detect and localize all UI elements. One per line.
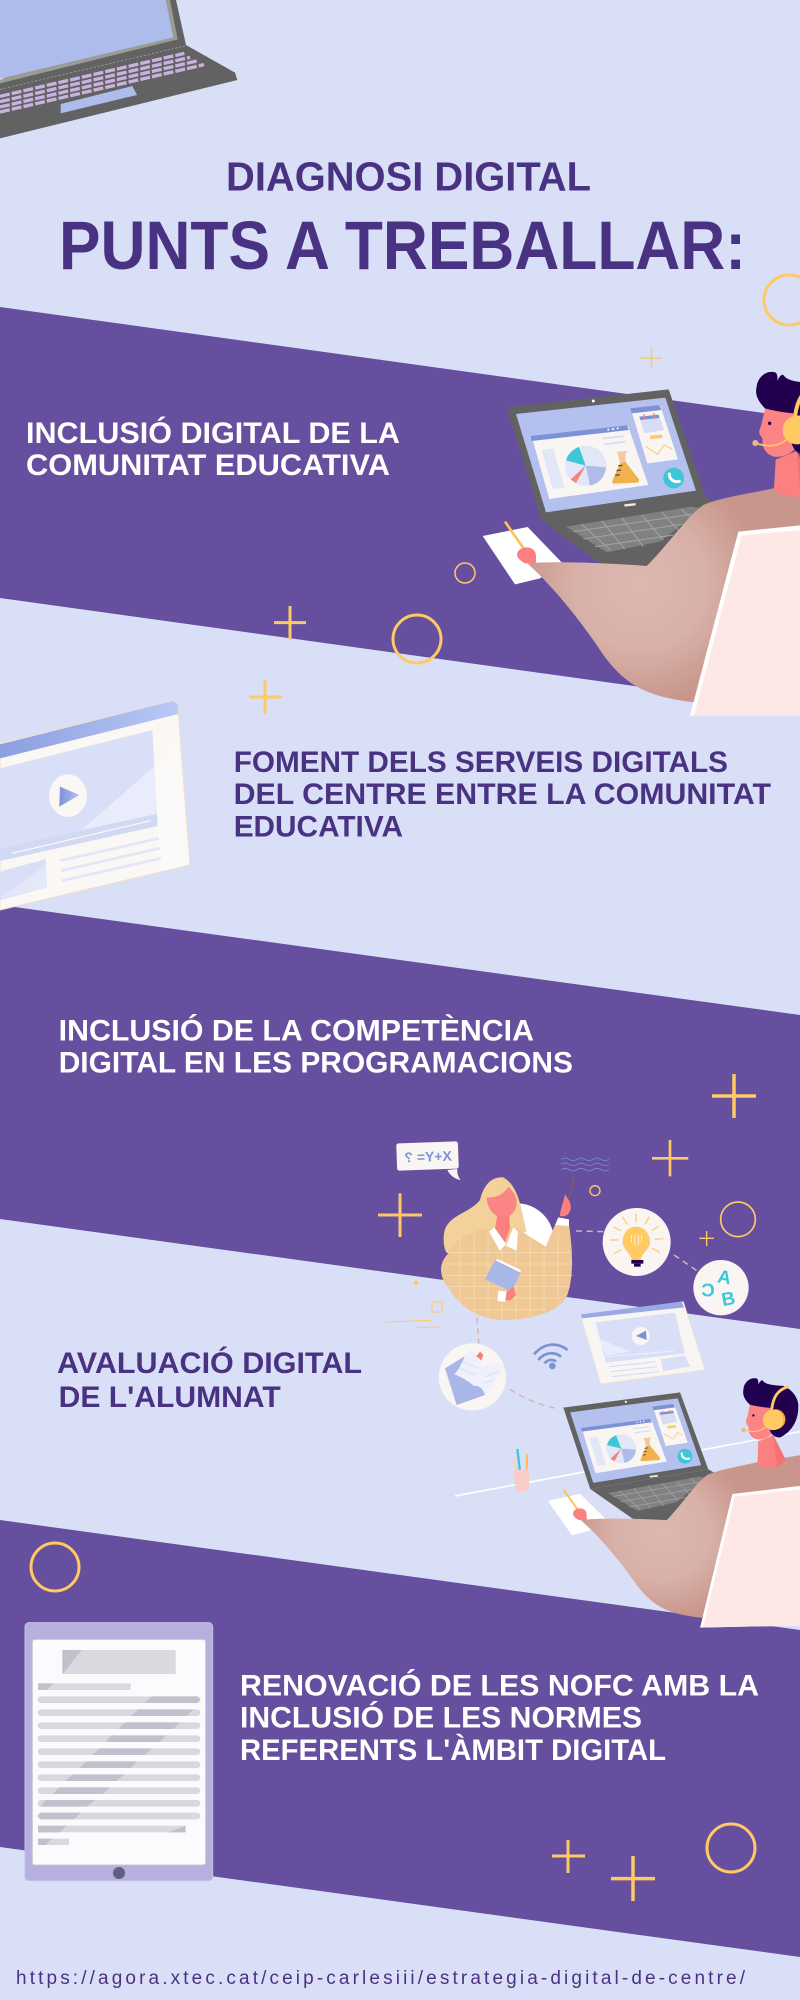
speech bubble: X+Y= ? — [404, 1148, 452, 1165]
title: punts a treballar: PUNTS A TREBALLAR: — [59, 207, 746, 284]
illustration: worker with laptop, second — [545, 1377, 800, 1631]
arm — [527, 478, 800, 702]
teacher — [441, 1177, 574, 1320]
deco: band 1 accents — [249, 275, 800, 714]
text block: competència: DIGITAL EN LES PROGRAMACIONS — [59, 1047, 573, 1080]
text block: avaluació — [57, 1346, 362, 1414]
illustration: video screen — [0, 701, 190, 910]
speech bubble — [396, 1141, 461, 1180]
abc circle: C — [701, 1280, 715, 1301]
small video window — [581, 1302, 705, 1384]
illustration: tablet document — [25, 1623, 213, 1881]
book circle — [439, 1343, 506, 1411]
accents — [378, 1140, 755, 1328]
text block: avaluació: AVALUACIÓ DIGITAL — [57, 1346, 362, 1380]
band 2 — [0, 905, 800, 1329]
deco: band 3 accents — [31, 1543, 755, 1901]
text block: inclusió digital: COMUNITAT EDUCATIVA — [26, 449, 390, 482]
dashed connectors — [477, 1231, 698, 1408]
band 3 — [0, 1520, 800, 1957]
source url: https://agora.xtec.cat/ceip-carlesiii/estrategia-digital-de-centre/ — [16, 1968, 746, 1989]
paper and pen — [483, 522, 562, 584]
text block: renovació: REFERENTS L'ÀMBIT DIGITAL — [240, 1733, 666, 1767]
person — [752, 372, 800, 497]
text block: renovació — [240, 1668, 759, 1767]
text block: inclusió digital: INCLUSIÓ DIGITAL DE LA — [26, 416, 400, 450]
illustration: worker with laptop — [483, 372, 800, 716]
text block: renovació: RENOVACIÓ DE LES NOFC AMB LA — [240, 1668, 759, 1702]
text block: inclusió digital — [26, 416, 400, 482]
text block: competència — [59, 1014, 573, 1080]
text block: renovació: INCLUSIÓ DE LES NORMES — [240, 1701, 642, 1735]
text block: competència: INCLUSIÓ DE LA COMPETÈNCIA — [59, 1014, 534, 1048]
text block: foment: FOMENT DELS SERVEIS DIGITALS — [234, 746, 728, 779]
deco: band 2 plus — [712, 1074, 756, 1118]
bulb circle — [603, 1208, 671, 1276]
abc circle: A — [716, 1265, 733, 1288]
icon: laptop top left — [0, 0, 237, 138]
illustration: teacher and icons — [378, 1140, 755, 1411]
text block: foment: EDUCATIVA — [234, 810, 403, 844]
desk line and pen cup — [455, 1432, 800, 1496]
text block: foment: DEL CENTRE ENTRE LA COMUNITAT — [234, 778, 771, 811]
text block: foment — [234, 746, 771, 844]
abc circle: B — [720, 1287, 737, 1310]
laptop — [507, 389, 717, 567]
text block: avaluació: DE L'ALUMNAT — [59, 1381, 281, 1414]
wifi — [534, 1345, 568, 1369]
waves — [561, 1158, 609, 1171]
band 1 — [0, 307, 800, 709]
abc circle — [693, 1260, 749, 1315]
jacket — [690, 521, 800, 716]
title: diagnosi digital: DIAGNOSI DIGITAL — [226, 154, 591, 200]
